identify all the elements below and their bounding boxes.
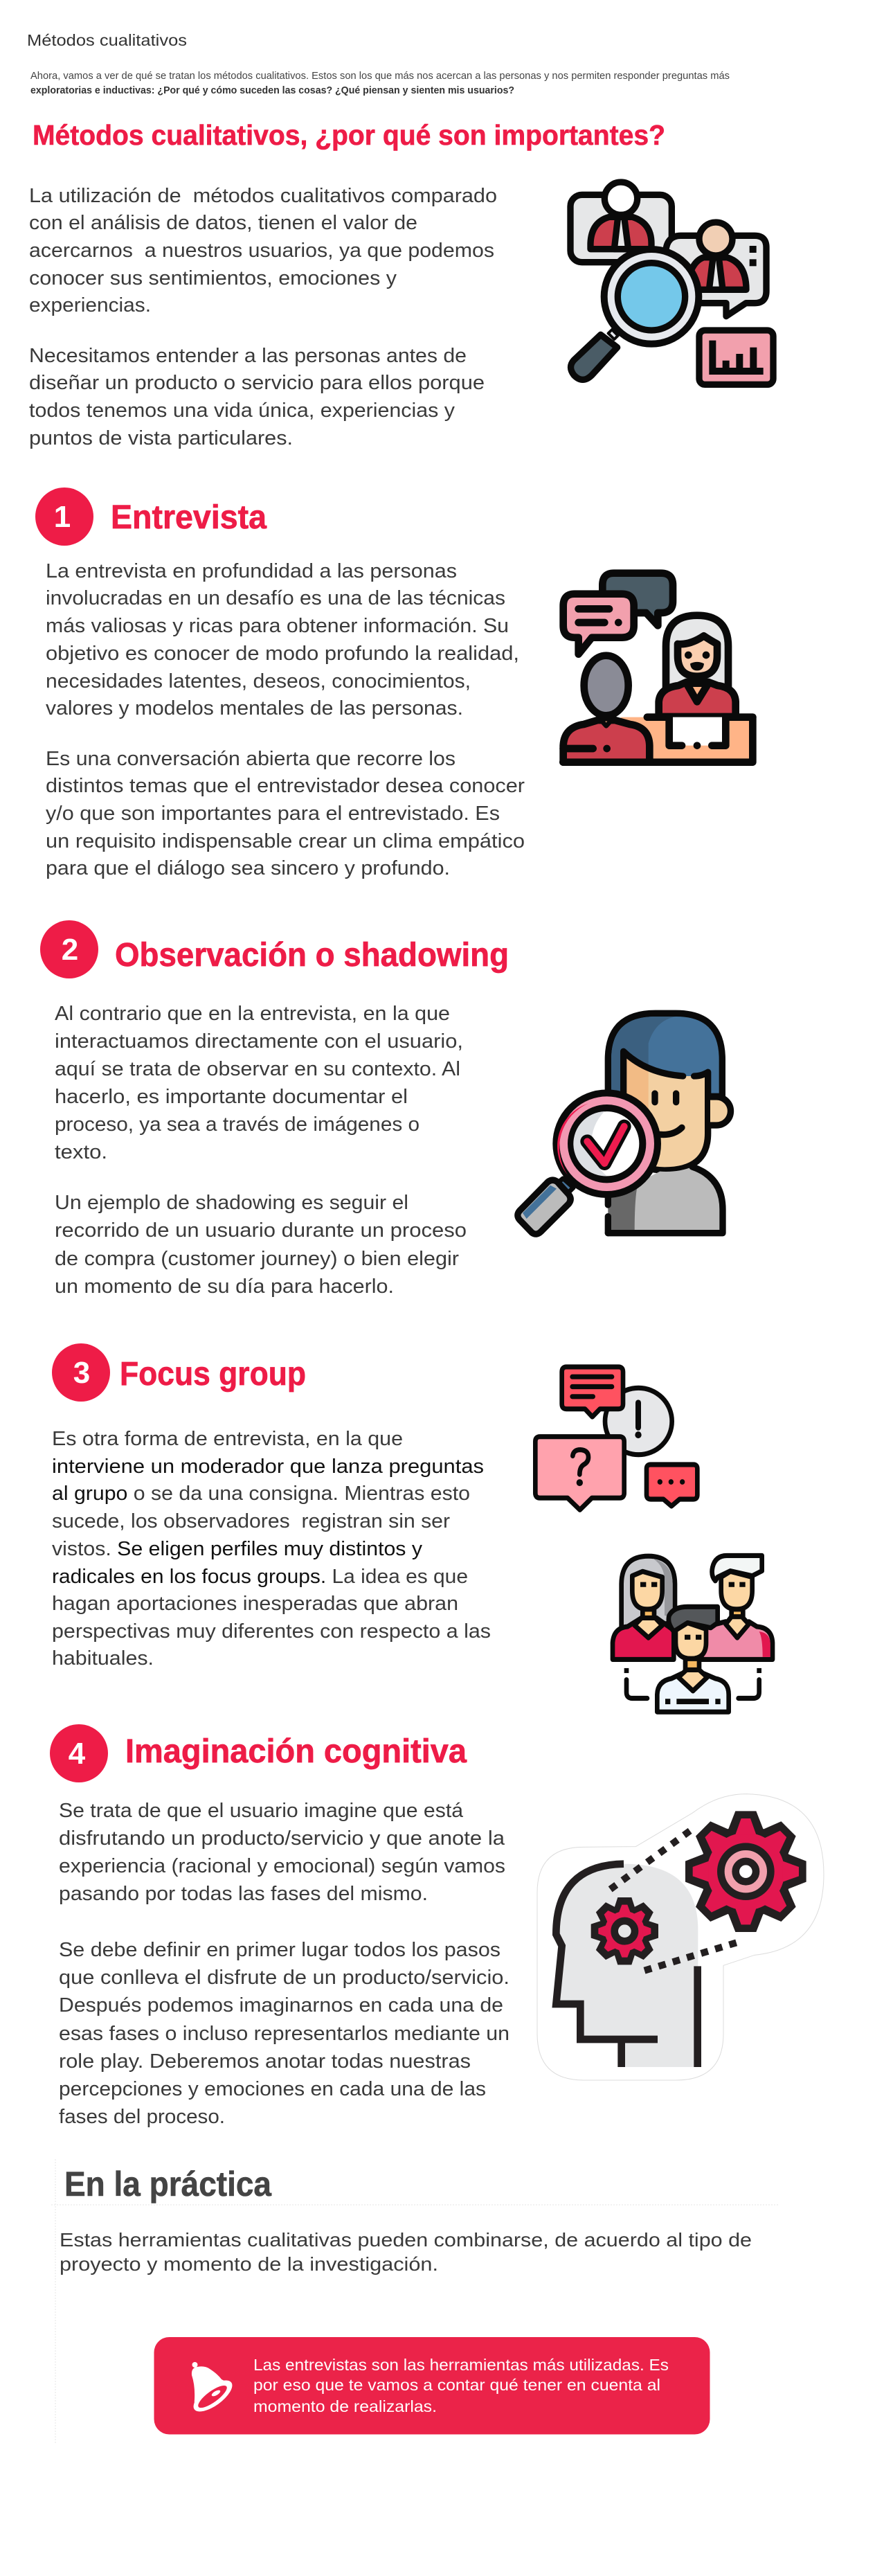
text block: Focus group: al grupo o se da una consigna. Mientras esto (52, 1483, 470, 1505)
text block: Entrevista: un requisito indispensable crear un clima empático (46, 830, 525, 852)
text block: shadowing: interactuamos directamente con el usuario, (55, 1030, 463, 1053)
panel: Entrevista (35, 488, 752, 879)
text block: why important: acercarnos a nuestros usuarios, ya que podemos (29, 240, 494, 262)
number badge 3 (52, 1343, 110, 1402)
text block: shadowing (55, 1003, 467, 1298)
text block: Entrevista (46, 560, 525, 879)
number badge 1 (35, 488, 93, 546)
icon: interview at desk (563, 573, 752, 762)
text block: Entrevista: distintos temas que el entrevistador desea conocer (46, 775, 525, 797)
number badge 3: 3 (73, 1356, 90, 1390)
intro text (30, 70, 730, 96)
icon: users under magnifier (570, 182, 773, 384)
text block: shadowing: Al contrario que en la entrevista, en la que (55, 1003, 450, 1025)
panel: Imaginación cognitiva (50, 1724, 824, 2128)
text block: practice: proyecto y momento de la investigación. (60, 2253, 438, 2275)
text block: Focus group: hagan aportaciones inesperadas que abran (52, 1593, 458, 1615)
text block: Focus group: radicales en los focus groups. La idea es que (52, 1566, 468, 1588)
heading: En la práctica: En la práctica (64, 2165, 272, 2203)
text block: shadowing: recorrido de un usuario durante un proceso (55, 1219, 467, 1242)
panel: why important (29, 119, 773, 449)
text block: why important: con el análisis de datos, tienen el valor de (29, 212, 417, 234)
icon: speech bubbles (535, 1367, 697, 1510)
text block: why important: conocer sus sentimientos, emociones y (29, 267, 397, 289)
page title: Métodos cualitativos (27, 31, 187, 49)
text block: shadowing: proceso, ya sea a través de imágenes o (55, 1113, 420, 1136)
text block: Focus group: Es otra forma de entrevista, en la que (52, 1428, 403, 1450)
text block: Imaginación cognitiva: fases del proceso. (59, 2106, 225, 2128)
heading: Focus group: Focus group (120, 1356, 306, 1393)
text block: shadowing: aquí se trata de observar en su contexto. Al (55, 1058, 460, 1080)
text block: Imaginación cognitiva: esas fases o incluso representarlos mediante un (59, 2023, 509, 2045)
text block: Entrevista: y/o que son importantes para el entrevistado. Es (46, 803, 500, 825)
icon: bell (189, 2362, 237, 2417)
callout text: momento de realizarlas. (253, 2397, 437, 2415)
callout text: Las entrevistas son las herramientas más utilizadas. Es (253, 2356, 669, 2374)
text block: why important: puntos de vista particulares. (29, 427, 293, 449)
text block: Entrevista: La entrevista en profundidad a las personas (46, 560, 457, 582)
intro text: exploratorias e inductivas: ¿Por qué y cómo suceden las cosas? ¿Qué piensan y sienten mis usuarios? (30, 84, 514, 96)
panel: Observación o shadowing (40, 920, 730, 1298)
number badge 4: 4 (69, 1737, 86, 1771)
text block: Imaginación cognitiva: que conlleva el disfrute de un producto/servicio. (59, 1967, 509, 1989)
heading: Imaginación cognitiva: Imaginación cognitiva (125, 1733, 467, 1770)
text block: practice (60, 2229, 752, 2275)
main heading: Métodos cualitativos, ¿por qué son importantes? (33, 119, 665, 151)
text block: Imaginación cognitiva: Se debe definir en primer lugar todos los pasos (59, 1939, 500, 1961)
number badge 2 (40, 920, 98, 978)
text block: Entrevista: necesidades latentes, deseos, conocimientos, (46, 670, 471, 692)
text block: Entrevista: para que el diálogo sea sincero y profundo. (46, 857, 450, 879)
icon: head with gears (537, 1794, 824, 2080)
text block: shadowing: un momento de su día para hacerlo. (55, 1276, 394, 1298)
text block: why important: Necesitamos entender a las personas antes de (29, 345, 467, 367)
text block: Focus group: sucede, los observadores registran sin ser (52, 1510, 450, 1532)
large gear (685, 1811, 806, 1932)
text block: Focus group (52, 1428, 491, 1670)
text block: why important: todos tenemos una vida única, experiencias y (29, 400, 455, 422)
text block: Imaginación cognitiva: role play. Deberemos anotar todas nuestras (59, 2050, 471, 2073)
text block: Focus group: perspectivas muy diferentes con respecto a las (52, 1620, 491, 1643)
panel: Focus group (52, 1343, 773, 1712)
text block: Imaginación cognitiva: disfrutando un producto/servicio y que anote la (59, 1827, 505, 1850)
text block: Focus group: habituales. (52, 1647, 154, 1670)
text block: Entrevista: más valiosas y ricas para obtener información. Su (46, 615, 509, 637)
header: page title and intro (27, 31, 730, 96)
text block: why important (29, 185, 497, 449)
text block: why important: experiencias. (29, 294, 151, 316)
text block: Imaginación cognitiva: percepciones y emociones en cada una de las (59, 2078, 486, 2100)
callout text (253, 2356, 669, 2415)
text block: Focus group: interviene un moderador que lanza preguntas (52, 1456, 484, 1478)
callout (154, 2337, 710, 2435)
heading: Observación o shadowing: Observación o shadowing (115, 937, 509, 974)
number badge 2: 2 (62, 933, 78, 967)
text block: Imaginación cognitiva: Después podemos imaginarnos en cada una de (59, 1994, 503, 2016)
panel: En la práctica (51, 2159, 779, 2444)
number badge 4 (50, 1724, 108, 1782)
text block: shadowing: hacerlo, es importante documentar el (55, 1086, 408, 1108)
text block: Imaginación cognitiva (59, 1800, 509, 2128)
text block: Imaginación cognitiva: experiencia (racional y emocional) según vamos (59, 1855, 505, 1877)
text block: shadowing: de compra (customer journey) o bien elegir (55, 1248, 459, 1270)
small gear (591, 1897, 658, 1965)
text block: shadowing: texto. (55, 1141, 107, 1163)
icon: person with magnifier (518, 1013, 730, 1234)
text block: Entrevista: objetivo es conocer de modo profundo la realidad, (46, 643, 519, 665)
number badge 1: 1 (54, 500, 71, 534)
text block: Entrevista: valores y modelos mentales de las personas. (46, 697, 463, 719)
text block: Entrevista: involucradas en un desafío es una de las técnicas (46, 587, 505, 609)
text block: Entrevista: Es una conversación abierta que recorre los (46, 748, 455, 770)
text block: why important: diseñar un producto o servicio para ellos porque (29, 372, 485, 394)
text block: Focus group: vistos. Se eligen perfiles muy distintos y (52, 1538, 423, 1560)
icon: group of people (613, 1555, 773, 1712)
heading: Entrevista: Entrevista (111, 499, 267, 536)
callout text: por eso que te vamos a contar qué tener en cuenta al (253, 2376, 660, 2394)
text block: why important: La utilización de métodos cualitativos comparado (29, 185, 497, 207)
text block: shadowing: Un ejemplo de shadowing es seguir el (55, 1192, 408, 1214)
text block: Imaginación cognitiva: Se trata de que el usuario imagine que está (59, 1800, 464, 1822)
intro text: Ahora, vamos a ver de qué se tratan los métodos cualitativos. Estos son los que más nos acercan a las personas y nos permiten responder preguntas más (30, 70, 730, 82)
text block: Imaginación cognitiva: pasando por todas las fases del mismo. (59, 1883, 428, 1905)
text block: practice: Estas herramientas cualitativas pueden combinarse, de acuerdo al tipo de (60, 2229, 752, 2251)
